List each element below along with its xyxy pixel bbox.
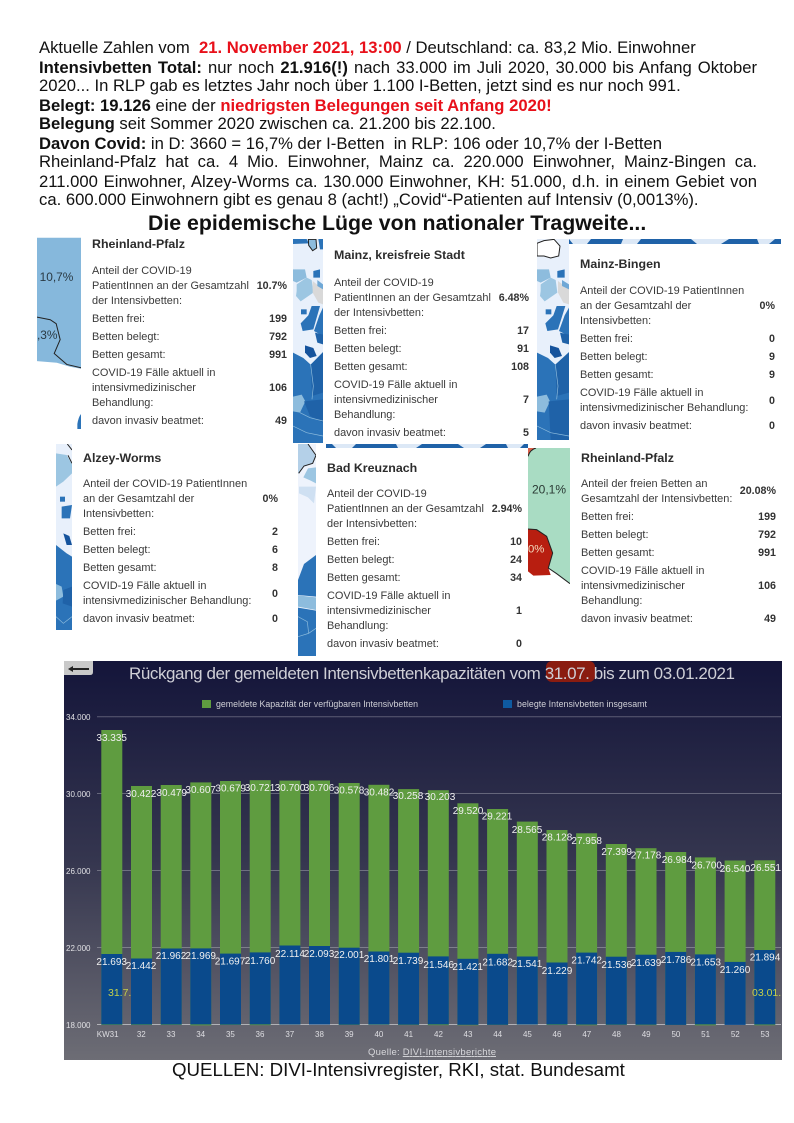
stat rows: Betten gesamt: [580,369,654,381]
stat rows: Anteil der COVID-19 PatientInnen [580,285,744,297]
capacity value labels: 30.607 [185,785,216,796]
icon: back button [64,661,93,675]
green capacity bars [101,730,775,1025]
occupied value labels: 21.546 [423,960,454,971]
stat rows: intensivmedizinischer [334,394,438,406]
stat rows: davon invasiv beatmet: [334,427,446,439]
chart title: Rückgang der gemeldeten Intensivbettenkapazitäten vom 31.07. bis zum 03.01.2021 [129,664,735,683]
map: free-bed share green and red: 20,1% [532,483,566,497]
stat rows: der Intensivbetten: [334,307,424,319]
stat rows: COVID-19 Fälle aktuell in [581,565,704,577]
stat rows: 2.94% [492,503,522,515]
stat rows: 6 [272,544,278,556]
stat rows: der Intensivbetten: [92,295,182,307]
capacity value labels: 30.422 [126,789,157,800]
x axis labels: KW31 [97,1030,119,1039]
stat rows: intensivmedizinischer Behandlung: [580,402,748,414]
stat rows: davon invasiv beatmet: [92,415,204,427]
stat rows: 24 [510,554,522,566]
capacity value labels: 26.700 [691,860,722,872]
occupied value labels: 21.682 [482,958,513,968]
stat rows: 5 [523,427,529,439]
occupied value labels: 21.693 [96,957,127,968]
x axis labels: 32 [137,1030,146,1039]
stat rows: Behandlung: [581,595,642,607]
stat rows: Anteil der COVID-19 [334,277,434,289]
stat rows: Betten frei: [92,313,145,325]
stat rows: 0% [263,493,278,505]
map: Mainz-Bingen region [537,239,569,440]
occupied value labels: 21.541 [512,959,543,970]
stat rows: davon invasiv beatmet: [327,638,439,650]
map: Alzey-Worms region [56,444,72,630]
panel: Alzey-Worms [56,444,278,630]
occupied value labels: 21.969 [185,951,216,962]
stat rows: Betten belegt: [581,529,648,541]
stat rows: 199 [269,313,287,325]
text block: current figures: Intensivbetten Total: nur noch 21.916(!) nach 33.000 im Juli 2020, 30.000 bis Anfang Oktober [39,58,757,77]
text block: current figures: Belegung seit Sommer 2020 zwischen ca. 21.200 bis 22.100. [39,114,496,133]
text block: current figures: Belegt: 19.126 eine der niedrigsten Belegungen seit Anfang 2020! [39,96,552,115]
stat rows: Betten frei: [334,325,387,337]
map: Mainz-Bingen top strip [569,239,781,244]
occupied value labels [96,949,781,977]
stat rows: Betten frei: [581,511,634,523]
stat rows: 0 [272,613,278,625]
stat rows: 0 [769,333,775,345]
stat rows: COVID-19 Fälle aktuell in [327,590,450,602]
map: Rheinland-Pfalz light blue: 10,7% [40,270,74,284]
stat rows: 10 [510,536,522,548]
stat rows: Betten gesamt: [83,562,157,574]
panel title: Mainz-Bingen [580,257,661,271]
y axis labels: 30.000 [66,790,91,799]
x axis labels: 49 [642,1030,651,1039]
capacity value labels: 28.565 [512,825,543,836]
stat rows: 49 [764,613,776,625]
stat rows [580,285,775,432]
occupied value labels: 21.742 [571,956,602,966]
stat rows: an der Gesamtzahl der [580,300,691,312]
stat rows: intensivmedizinischer Behandlung: [83,595,251,607]
stat rows: 0% [760,300,775,312]
stat rows: Behandlung: [327,620,388,632]
capacity value labels [96,733,781,875]
capacity value labels: 29.520 [453,806,484,817]
stat rows: Betten gesamt: [334,361,408,373]
stat rows: 9 [769,369,775,381]
map: free-bed share green and red [528,448,570,584]
stat rows: COVID-19 Fälle aktuell in [580,387,703,399]
occupied value labels: 21.801 [364,954,395,965]
occupied value labels: 22.001 [334,950,365,961]
occupied value labels: 21.421 [452,962,483,973]
stat rows: Anteil der COVID-19 [327,488,427,500]
x axis labels: 48 [612,1030,621,1039]
x axis labels: 33 [167,1030,176,1039]
stat rows: Betten frei: [327,536,380,548]
stat rows: der Intensivbetten: [327,518,417,530]
stat rows: 20.08% [740,485,776,497]
stat rows: 8 [272,562,278,574]
stat rows: Betten gesamt: [92,349,166,361]
capacity value labels: 28.128 [542,832,573,844]
stat rows: Anteil der COVID-19 PatientInnen [83,478,247,490]
x axis labels: 50 [671,1030,681,1039]
panel: Rheinland-Pfalz share of COVID patients [37,237,287,429]
stat rows: 10.7% [257,280,287,292]
stat rows: 7 [523,394,529,406]
stat rows: 199 [758,511,776,523]
stat rows: 91 [517,343,529,355]
text block: current figures: 2020... In RLP gab es letztes Jahr noch über 1.100 I-Betten, jetzt sind es nur noch 991. [39,76,681,95]
panel: Mainz-Bingen [537,239,781,440]
stat rows: 0 [769,420,775,432]
capacity value labels: 26.984 [662,855,693,866]
legend: belegte Intensivbetten insgesamt [517,699,648,709]
stat rows: Betten belegt: [83,544,150,556]
map: Bad Kreuznach top strip [326,444,528,448]
capacity value labels: 30.203 [425,792,456,803]
panel title: Rheinland-Pfalz [92,237,185,251]
stat rows [92,265,287,427]
stat rows: 991 [758,547,776,559]
stat rows [327,488,522,650]
stat rows: PatientInnen an der Gesamtzahl [327,503,484,515]
occupied value labels: 21.653 [690,958,721,968]
x axis labels: 44 [493,1030,503,1039]
text block: current figures: Aktuelle Zahlen vom 21. November 2021, 13:00 / Deutschland: ca. 83,2 Mio. Einwohner [39,38,696,57]
capacity value labels: 30.706 [304,783,335,794]
stat rows: 792 [758,529,776,541]
occupied value labels: 21.442 [126,961,157,972]
text block: current figures: Davon Covid: in D: 3660 = 16,7% der I-Betten in RLP: 106 oder 10,7% der I-Betten [39,134,662,153]
stat rows: 2 [272,526,278,538]
y axis labels: 34.000 [66,713,91,722]
occupied value labels: 21.894 [750,952,781,964]
occupied value labels: 21.760 [245,956,276,967]
capacity value labels: 29.221 [482,812,513,822]
panel title: Rheinland-Pfalz [581,451,674,465]
stat rows: 0 [272,588,278,600]
x axis labels: 51 [701,1030,711,1039]
stat rows: Betten belegt: [92,331,160,343]
chart: reported ICU capacity decline [64,661,782,1060]
stat rows [581,478,776,625]
stat rows: davon invasiv beatmet: [83,613,195,625]
x axis labels [97,1030,770,1039]
capacity value labels: 33.335 [96,733,127,744]
occupied value labels: 21.536 [601,960,632,971]
capacity value labels: 30.482 [364,788,395,798]
stat rows: davon invasiv beatmet: [580,420,692,432]
occupied value labels: 22.114 [275,949,305,960]
capacity value labels: 30.258 [393,791,424,802]
stat rows: Gesamtzahl der Intensivbetten: [581,493,732,505]
capacity value labels: 30.479 [156,788,187,799]
stat rows: Behandlung: [334,409,395,421]
stat rows: 1 [516,605,522,617]
x axis labels: 43 [464,1030,473,1039]
y axis labels: 22.000 [66,944,91,953]
x axis labels: 53 [761,1030,770,1039]
occupied value labels: 21.962 [156,951,187,962]
occupied value labels: 21.697 [215,956,246,968]
text block: current figures: Rheinland-Pfalz hat ca. 4 Mio. Einwohner, Mainz ca. 220.000 Einwohner, Mainz-Bingen ca. [39,152,757,171]
occupied value labels: 21.229 [542,966,573,977]
stat rows: COVID-19 Fälle aktuell in [83,580,206,592]
x axis labels: 41 [404,1030,414,1039]
stat rows: an der Gesamtzahl der [83,493,194,505]
stat rows: intensivmedizinischer [92,382,196,394]
heading: epidemic lie: Die epidemische Lüge von nationaler Tragweite... [148,211,646,235]
stat rows: Anteil der COVID-19 [92,265,192,277]
text block: current figures [39,38,757,209]
x axis labels: 42 [434,1030,443,1039]
stat rows: 49 [275,415,287,427]
capacity value labels: 27.399 [601,847,632,858]
stat rows: Betten gesamt: [581,547,655,559]
legend [202,699,648,709]
x axis labels: 47 [582,1030,592,1039]
stat rows: Betten frei: [83,526,136,538]
map: Rheinland-Pfalz light blue [37,238,81,429]
capacity value labels: 30.578 [334,786,365,796]
stat rows: 9 [769,351,775,363]
map: Rheinland-Pfalz light blue: ,3% [37,328,58,342]
date annotations: 31.7. [108,987,131,999]
y axis labels: 26.000 [66,867,91,876]
occupied value labels: 21.639 [631,958,662,969]
capacity value labels: 27.178 [631,850,662,862]
capacity value labels: 26.551 [750,863,781,874]
panel title: Alzey-Worms [83,451,161,465]
x axis labels: 36 [256,1030,265,1039]
map: Mainz region [293,239,323,443]
stat rows: Behandlung: [92,397,153,409]
panel title: Bad Kreuznach [327,461,417,475]
stat rows [334,277,529,439]
chart source: Quelle: DIVI-Intensivberichte [368,1047,496,1058]
x axis labels: 37 [285,1030,295,1039]
y axis labels [66,713,91,1030]
stat rows: 106 [758,580,776,592]
occupied value labels: 21.739 [393,956,424,967]
stat rows: davon invasiv beatmet: [581,613,693,625]
stat rows: Intensivbetten: [580,315,651,327]
stat rows: Betten belegt: [327,554,394,566]
x axis labels: 45 [523,1030,532,1039]
stat rows [83,478,278,625]
stat rows: PatientInnen an der Gesamtzahl [92,280,249,292]
blue occupied bars [101,946,775,1025]
stat rows: PatientInnen an der Gesamtzahl [334,292,491,304]
stat rows: intensivmedizinischer [327,605,431,617]
date annotations: 03.01. [752,987,781,999]
panel: Rheinland-Pfalz share of free beds [528,448,776,625]
stat rows: Intensivbetten: [83,508,154,520]
panel title: Mainz, kreisfreie Stadt [334,248,465,262]
stat rows: Betten belegt: [580,351,648,363]
map: Bad Kreuznach region [298,444,316,656]
x axis labels: 34 [196,1030,206,1039]
sources line: QUELLEN: DIVI-Intensivregister, RKI, stat. Bundesamt [172,1059,625,1080]
occupied value labels: 21.786 [661,955,692,966]
capacity value labels: 27.958 [571,836,602,847]
text block: current figures: ca. 600.000 Einwohnern gibt es genau 8 (acht!) „Covid“-Patienten auf Intensiv (0,0013%). [39,190,699,209]
map: free-bed share green and red: 0% [528,544,544,556]
x axis labels: 46 [553,1030,562,1039]
stat rows: Anteil der freien Betten an [581,478,707,490]
panel: Mainz, kreisfreie Stadt [293,239,529,443]
capacity value labels: 26.540 [720,864,751,875]
stat rows: 108 [511,361,529,373]
capacity value labels: 30.721 [245,783,276,794]
date annotations [108,987,781,999]
stat rows: 34 [510,572,522,584]
stat rows: COVID-19 Fälle aktuell in [334,379,457,391]
capacity value labels: 30.679 [215,784,246,794]
y axis labels: 18.000 [66,1021,91,1030]
stat rows: 6.48% [499,292,529,304]
x axis labels: 40 [374,1030,384,1039]
x axis labels: 38 [315,1030,324,1039]
stat rows: 991 [269,349,287,361]
legend: gemeldete Kapazität der verfügbaren Intensivbetten [216,699,418,709]
stat rows: Betten belegt: [334,343,402,355]
occupied value labels: 22.093 [304,949,335,960]
occupied value labels: 21.260 [720,965,751,976]
stat rows: Betten gesamt: [327,572,401,584]
stat rows: 106 [269,382,287,394]
stat rows: 0 [769,395,775,407]
stat rows: 17 [517,325,529,337]
x axis labels: 39 [345,1030,354,1039]
stat rows: intensivmedizinischer [581,580,685,592]
capacity value labels: 30.700 [275,783,306,794]
x axis labels: 35 [226,1030,235,1039]
panel: Bad Kreuznach [298,444,528,656]
x axis labels: 52 [731,1030,740,1039]
text block: current figures: 211.000 Einwohner, Alzey-Worms ca. 130.000 Einwohner, KH: 51.000, d.h. in einem Gebiet von [39,172,757,191]
stat rows: COVID-19 Fälle aktuell in [92,367,215,379]
stat rows: 0 [516,638,522,650]
stat rows: Betten frei: [580,333,633,345]
stat rows: 792 [269,331,287,343]
